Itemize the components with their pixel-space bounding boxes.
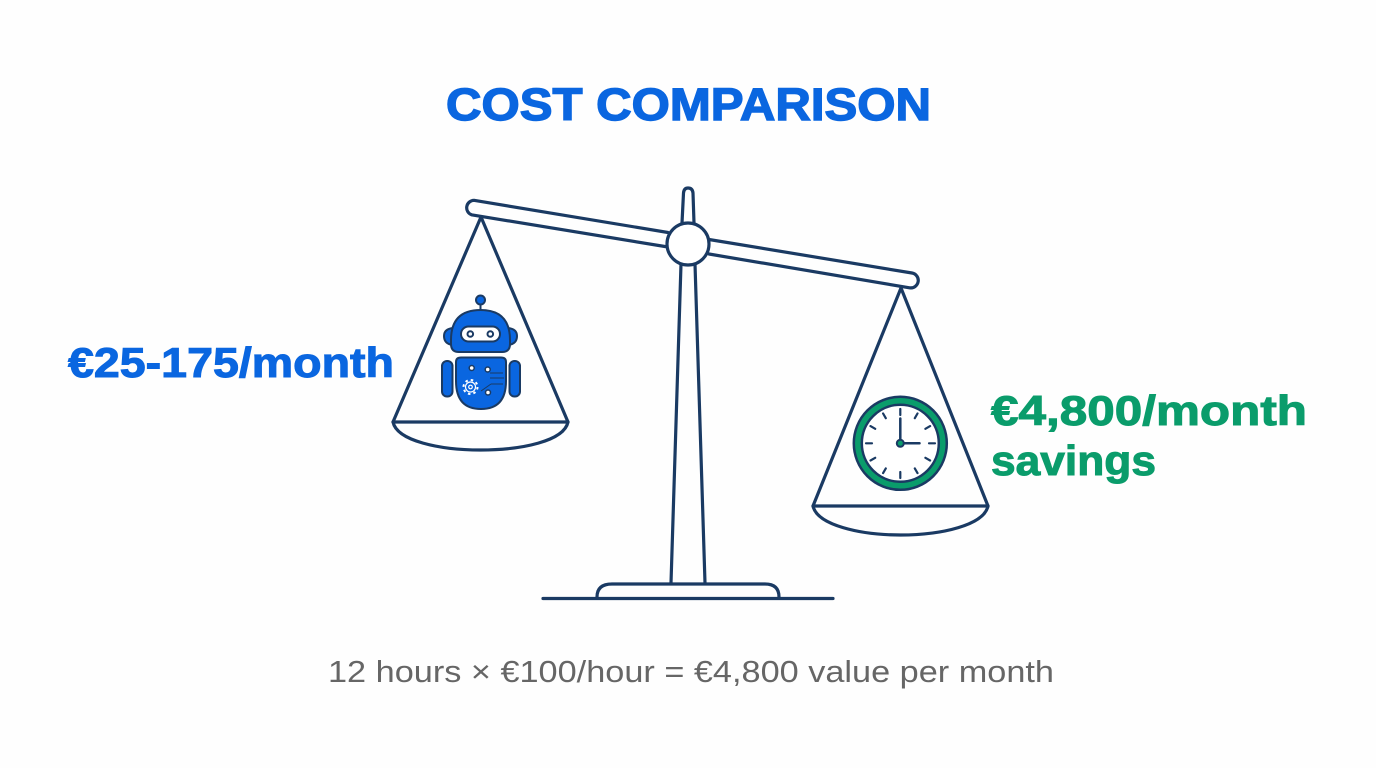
clock face bbox=[862, 405, 939, 482]
title: COST COMPARISON bbox=[446, 79, 931, 130]
icon: robot bbox=[442, 296, 520, 409]
footnote: calculation: 12 hours × €100/hour = €4,800 value per month bbox=[328, 654, 1054, 689]
scale pivot bbox=[667, 223, 709, 265]
label: savings: €4,800/month bbox=[991, 387, 1307, 434]
robot eyes bbox=[468, 331, 493, 337]
scale base bbox=[543, 584, 833, 598]
robot body bbox=[456, 358, 506, 409]
clock ticks bbox=[866, 409, 935, 478]
scale column bbox=[671, 264, 705, 583]
label: AI cost: €25-175/month bbox=[68, 339, 394, 386]
robot face plate bbox=[461, 326, 500, 342]
scale top finial bbox=[682, 188, 694, 223]
balance scale bbox=[393, 188, 988, 598]
left pan bbox=[393, 217, 568, 450]
scale beam bbox=[467, 200, 918, 288]
icon: clock bbox=[854, 397, 947, 490]
clock ring bbox=[854, 397, 947, 490]
robot circuit details bbox=[481, 373, 504, 391]
label: savings: savings bbox=[991, 437, 1156, 484]
robot head bbox=[451, 310, 510, 352]
robot ears bbox=[444, 328, 517, 345]
robot gear bbox=[464, 380, 478, 394]
clock hands bbox=[900, 418, 920, 443]
right pan bbox=[813, 288, 988, 535]
robot antenna bbox=[476, 296, 485, 311]
label: savings bbox=[991, 387, 1307, 484]
clock hub bbox=[897, 440, 904, 447]
robot arms bbox=[442, 361, 520, 396]
robot dots bbox=[469, 366, 490, 395]
